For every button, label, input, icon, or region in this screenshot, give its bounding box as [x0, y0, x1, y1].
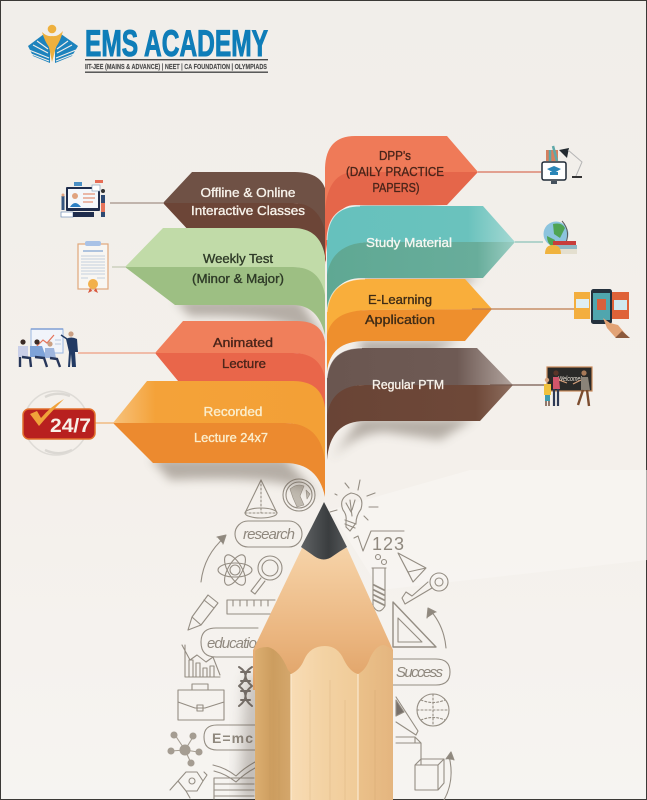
doodle: E=mc pill: E=mc [212, 730, 253, 746]
doodle: light bulb [330, 480, 378, 531]
doodle illustrations behind pencil [168, 479, 454, 800]
doodle: molecule [168, 732, 202, 766]
doodle: curved arrow left [201, 535, 226, 582]
board text: Welcome! [558, 376, 582, 383]
doodle: pencil lower right [396, 697, 418, 735]
ribbon: DPP's Daily Practice Papers [325, 136, 478, 265]
doodle: key [402, 573, 448, 604]
label: Lecture [222, 356, 266, 371]
doodle: E=mc pill [204, 725, 255, 750]
ribbon: Recorded Lecture 24x7 [113, 381, 325, 497]
label: Weekly Test [203, 251, 273, 266]
doodle: pencil [188, 595, 218, 630]
label: Recorded [204, 404, 262, 419]
doodle: sphere [417, 694, 449, 726]
doodle: DNA [239, 667, 252, 706]
doodle: success pill: Success [396, 664, 444, 681]
label: (DAILY PRACTICE [346, 164, 444, 179]
icon: meeting presentation [18, 329, 78, 367]
logo tagline: IIT-JEE (MAINS & ADVANCE) | NEET | CA FOUNDATION | OLYMPIADS [85, 62, 267, 71]
ribbon: Animated Lecture [155, 321, 325, 410]
icon: parents and teacher at blackboard [544, 367, 592, 406]
icon: desk, monitor and lamp [542, 146, 582, 184]
ribbon: Study Material [327, 206, 515, 318]
ribbon: E-Learning Application [327, 279, 492, 372]
label: (Minor & Major) [192, 271, 284, 286]
label: Regular PTM [372, 377, 444, 392]
doodle: magnifier [251, 556, 282, 594]
doodle: ruler [227, 600, 275, 614]
label: Application [365, 312, 435, 327]
doodle: curved arrow right [427, 608, 446, 648]
doodle: test tube [372, 554, 386, 611]
doodle: arrow lower right [444, 752, 454, 800]
doodle: square root 123: 123 [372, 534, 404, 554]
doodle: education pill: educatio [207, 635, 257, 652]
doodle: hexagons [170, 772, 207, 798]
doodle: education pill [201, 628, 258, 657]
doodle: research pill: research [243, 526, 295, 543]
icon: globe and books [544, 221, 577, 254]
doodle: cone [245, 480, 277, 518]
label: E-Learning [368, 292, 432, 307]
logo [28, 23, 268, 73]
pencil wood cone [253, 548, 393, 690]
icon: 24/7 badge [23, 391, 95, 455]
label: PAPERS) [372, 180, 420, 195]
ribbon shadows [150, 201, 480, 500]
pencil lead [301, 502, 347, 560]
label: Offline & Online [200, 185, 296, 200]
doodle: square root 123 [354, 531, 404, 554]
logo wordmark: EMS ACADEMY [85, 23, 268, 64]
doodle: success pill [393, 659, 450, 685]
ribbon: Weekly Test (Minor & Major) [125, 228, 325, 335]
connector lines [78, 172, 574, 423]
icon: online class presenter [61, 180, 105, 217]
ribbon: Regular PTM [327, 348, 513, 460]
doodle: globe [283, 479, 315, 511]
label: Interactive Classes [191, 203, 306, 218]
doodle: briefcase [178, 684, 224, 720]
doodle: research pill [235, 521, 302, 547]
doodle: set square [393, 602, 436, 647]
icon: certificate on clipboard [78, 241, 108, 293]
pencil [240, 502, 393, 800]
label: DPP's [379, 148, 411, 163]
label: Lecture 24x7 [194, 430, 268, 445]
doodle: bar chart [182, 645, 220, 677]
doodle: cubes [396, 737, 444, 790]
doodle: atom [218, 552, 252, 588]
pencil body right facet [358, 645, 393, 800]
pencil light edge [291, 674, 358, 800]
pencil body left facet [255, 647, 291, 800]
ribbon: Offline & Online Interactive Classes [163, 172, 326, 262]
logo emblem: open book with figure [28, 25, 78, 63]
pencil body centre facet [291, 646, 358, 800]
label: Animated [213, 335, 273, 350]
pencil shadow [240, 670, 262, 800]
doodle: stack of books [213, 762, 255, 799]
doodle: paper plane [398, 553, 426, 582]
icon: mobile app screens [574, 289, 630, 338]
label: Study Material [366, 235, 452, 250]
badge text: 24/7 [50, 416, 91, 437]
